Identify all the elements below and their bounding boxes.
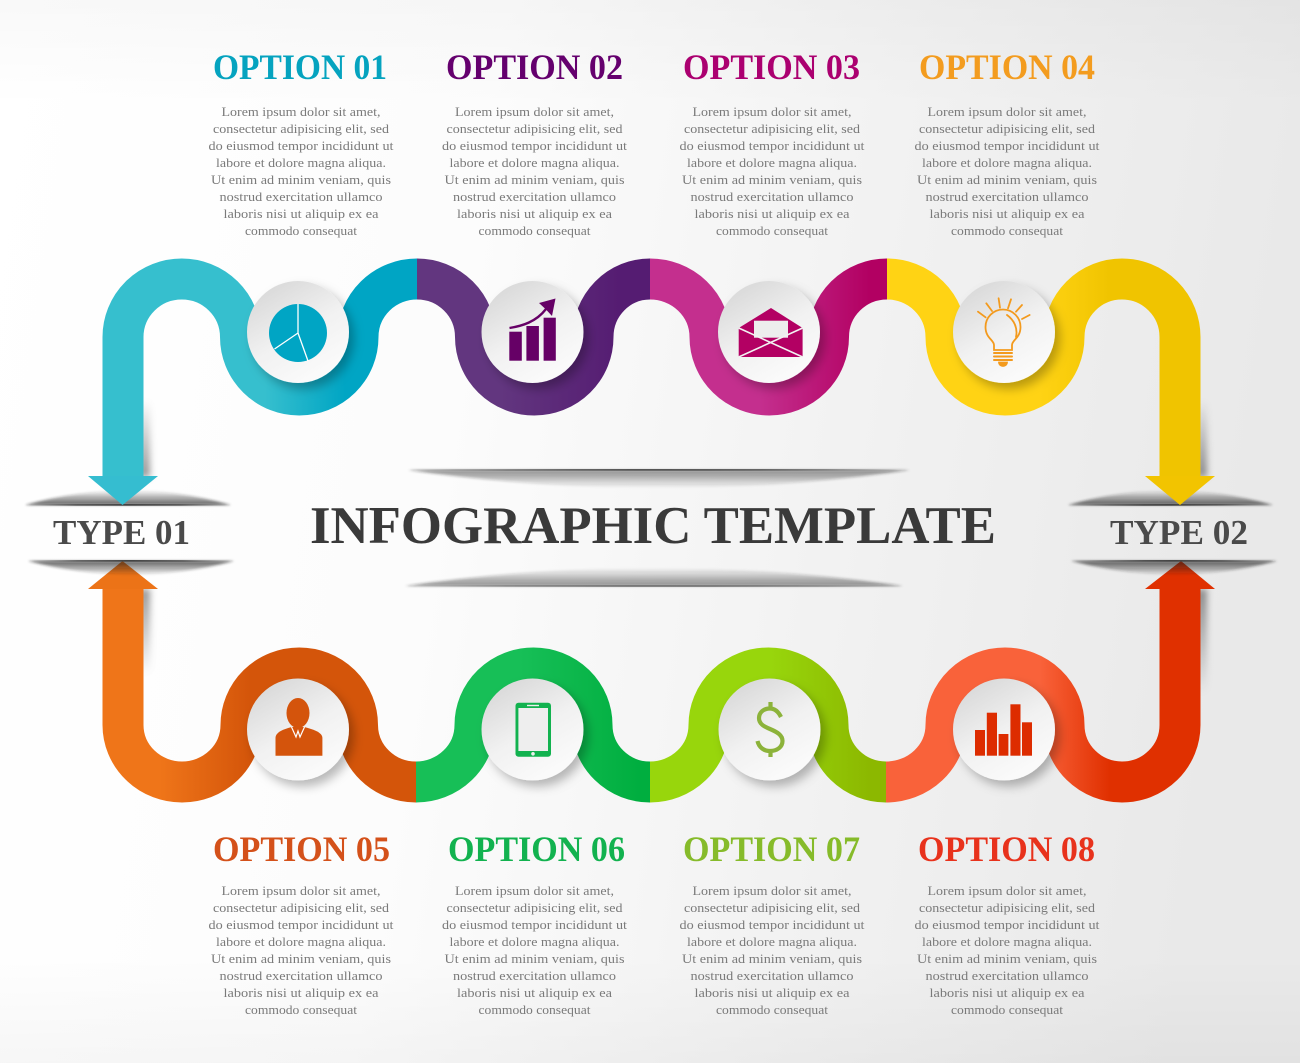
body text: option 06: Lorem ipsum dolor sit amet, [455, 884, 614, 898]
body text: option 08: consectetur adipisicing elit, sed [919, 901, 1096, 915]
ribbon segment: yellow [887, 279, 1180, 478]
body text: option 03: Ut enim ad minim veniam, quis [682, 173, 862, 187]
body text: option 03: consectetur adipisicing elit, sed [684, 122, 861, 136]
slit shadows above the type labels [25, 490, 1273, 506]
body text: option 01: Ut enim ad minim veniam, quis [211, 173, 391, 187]
circle: option 02 [482, 281, 584, 383]
heading: option 03: OPTION 03 [683, 47, 860, 87]
body text: option 07 [680, 884, 865, 1017]
body text: option 06: commodo consequat [478, 1003, 591, 1017]
body text: option 06: Ut enim ad minim veniam, quis [444, 952, 625, 966]
body text: option 04: consectetur adipisicing elit, sed [919, 122, 1096, 136]
arrow head: teal down [88, 476, 158, 505]
body text: option 05: Lorem ipsum dolor sit amet, [222, 884, 380, 898]
body text: option 05: Ut enim ad minim veniam, quis [211, 952, 391, 966]
body text: option 04: labore et dolore magna aliqua. [922, 156, 1092, 170]
body text: option 02: commodo consequat [478, 224, 591, 238]
heading: option 02: OPTION 02 [446, 47, 623, 87]
body text: option 02: labore et dolore magna aliqua. [450, 156, 620, 170]
body text: option 04: Lorem ipsum dolor sit amet, [928, 105, 1086, 119]
body text: option 05: commodo consequat [245, 1003, 358, 1017]
circle: option 03 [718, 281, 820, 383]
body text: option 05: nostrud exercitation ullamco [220, 969, 382, 983]
option 04 block [914, 47, 1100, 238]
body text: option 07: labore et dolore magna aliqua. [687, 935, 857, 949]
body text: option 05: labore et dolore magna aliqua. [216, 935, 386, 949]
body text: option 06: do eiusmod tempor incididunt ut [442, 918, 628, 932]
body text: option 02: do eiusmod tempor incididunt ut [442, 139, 628, 153]
ribbon segment: orange [123, 587, 416, 782]
body text: option 07: commodo consequat [716, 1003, 829, 1017]
body text: option 01: laboris nisi ut aliquip ex ea [224, 207, 379, 221]
heading: option 06: OPTION 06 [448, 829, 625, 869]
stem shadows [139, 400, 1207, 694]
icon: growth chart [509, 298, 556, 361]
option 02 block [442, 47, 628, 238]
body text: option 01: commodo consequat [245, 224, 358, 238]
label: type 02: TYPE 02 [1110, 513, 1248, 552]
body text: option 02: consectetur adipisicing elit, sed [446, 122, 623, 136]
body text: option 05 [208, 884, 394, 1017]
circle: option 08 [953, 678, 1055, 780]
option 03 block [680, 47, 865, 238]
body text: option 03: commodo consequat [716, 224, 829, 238]
title slit: bottom [405, 568, 903, 587]
body text: option 07: nostrud exercitation ullamco [690, 969, 854, 983]
body text: option 04: do eiusmod tempor incididunt ut [914, 139, 1100, 153]
body text: option 08 [914, 884, 1100, 1017]
body text: option 08: laboris nisi ut aliquip ex ea [930, 986, 1085, 1000]
body text: option 01 [208, 105, 394, 238]
body text: option 07: consectetur adipisicing elit, sed [684, 901, 861, 915]
option 01 block [208, 47, 394, 238]
heading: option 05: OPTION 05 [213, 829, 390, 869]
icon: open envelope [739, 308, 803, 357]
body text: option 07: laboris nisi ut aliquip ex ea [694, 986, 850, 1000]
icon: smartphone [516, 703, 551, 757]
body text: option 04: laboris nisi ut aliquip ex ea [930, 207, 1085, 221]
body text: option 02: Lorem ipsum dolor sit amet, [455, 105, 614, 119]
body text: option 05: laboris nisi ut aliquip ex ea [224, 986, 379, 1000]
body text: option 06: consectetur adipisicing elit, sed [446, 901, 623, 915]
ribbon segment: purple [417, 279, 650, 395]
body text: option 05: consectetur adipisicing elit, sed [213, 901, 390, 915]
heading: option 07: OPTION 07 [683, 829, 860, 869]
body text: option 03: Lorem ipsum dolor sit amet, [692, 105, 852, 119]
body text: option 07: do eiusmod tempor incididunt ut [680, 918, 865, 932]
body text: option 04 [914, 105, 1100, 238]
option 08 block [914, 829, 1100, 1017]
ribbon segment: lime [650, 668, 886, 782]
body text: option 08: Lorem ipsum dolor sit amet, [928, 884, 1086, 898]
ribbon segment: red [886, 587, 1180, 782]
body text: option 02: nostrud exercitation ullamco [453, 190, 616, 204]
body text: option 01: Lorem ipsum dolor sit amet, [222, 105, 380, 119]
body text: option 08: do eiusmod tempor incididunt ut [914, 918, 1100, 932]
slit shadows below the type labels [28, 560, 1277, 574]
circle: option 05 [247, 678, 349, 780]
body text: option 03: nostrud exercitation ullamco [690, 190, 854, 204]
body text: option 01: labore et dolore magna aliqua. [216, 156, 386, 170]
body text: option 07: Ut enim ad minim veniam, quis [682, 952, 862, 966]
option 06 block [442, 829, 628, 1017]
body text: option 04: nostrud exercitation ullamco [926, 190, 1088, 204]
body text: option 05: do eiusmod tempor incididunt ut [208, 918, 394, 932]
circle: option 01 [247, 281, 349, 383]
body text: option 06: labore et dolore magna aliqua. [450, 935, 620, 949]
bottom ribbon [123, 587, 1180, 782]
body text: option 08: nostrud exercitation ullamco [926, 969, 1088, 983]
icon: dollar sign [758, 702, 782, 757]
icon: pie chart [269, 304, 327, 362]
body text: option 06 [442, 884, 628, 1017]
body text: option 06: laboris nisi ut aliquip ex ea [457, 986, 613, 1000]
title: INFOGRAPHIC TEMPLATE [310, 497, 996, 555]
title slit: top [408, 469, 910, 488]
top ribbon [123, 279, 1180, 478]
body text: option 01: consectetur adipisicing elit, sed [213, 122, 390, 136]
body text: option 03: do eiusmod tempor incididunt ut [680, 139, 865, 153]
body text: option 03 [680, 105, 865, 238]
body text: option 06: nostrud exercitation ullamco [453, 969, 616, 983]
arrow head: red up [1145, 561, 1215, 589]
body text: option 07: Lorem ipsum dolor sit amet, [692, 884, 852, 898]
heading: option 01: OPTION 01 [213, 47, 387, 87]
body text: option 02: laboris nisi ut aliquip ex ea [457, 207, 613, 221]
arrow head: yellow down [1145, 476, 1215, 505]
heading: option 08: OPTION 08 [918, 829, 1095, 869]
body text: option 02 [442, 105, 628, 238]
icon: bar chart [975, 704, 1032, 756]
arrow head: orange up [88, 561, 158, 589]
body text: option 08: labore et dolore magna aliqua. [922, 935, 1092, 949]
body text: option 03: laboris nisi ut aliquip ex ea [694, 207, 850, 221]
body text: option 08: Ut enim ad minim veniam, quis [917, 952, 1097, 966]
option 07 block [680, 829, 865, 1017]
body text: option 04: Ut enim ad minim veniam, quis [917, 173, 1097, 187]
icon: light bulb [978, 298, 1030, 366]
ribbon segment: magenta [650, 279, 887, 395]
label: type 01: TYPE 01 [53, 513, 190, 552]
body text: option 03: labore et dolore magna aliqua. [687, 156, 857, 170]
body text: option 01: nostrud exercitation ullamco [220, 190, 382, 204]
circle: option 06 [482, 678, 584, 780]
body text: option 02: Ut enim ad minim veniam, quis [444, 173, 625, 187]
body text: option 04: commodo consequat [951, 224, 1064, 238]
ribbon segment: teal [123, 279, 417, 478]
icon: person [276, 698, 322, 756]
body text: option 08: commodo consequat [951, 1003, 1064, 1017]
circle: option 04 [953, 281, 1055, 383]
heading: option 04: OPTION 04 [919, 47, 1095, 87]
option 05 block [208, 829, 394, 1017]
ribbon segment: green [416, 668, 650, 782]
body text: option 01: do eiusmod tempor incididunt ut [208, 139, 394, 153]
circle: option 07 [718, 678, 820, 780]
